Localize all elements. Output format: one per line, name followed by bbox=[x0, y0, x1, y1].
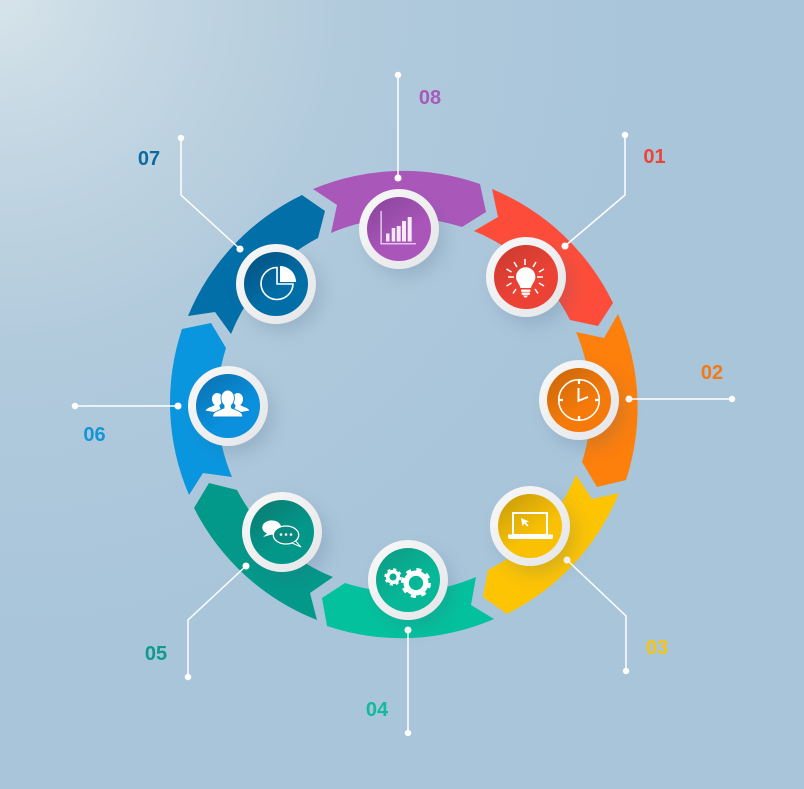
leader lines with end dots bbox=[72, 72, 734, 736]
arrow segment 04 bbox=[322, 577, 494, 638]
icon: chat bubbles bbox=[262, 520, 301, 547]
arrow segment 03 bbox=[483, 475, 619, 614]
circle badge 07 bbox=[236, 244, 322, 332]
number labels bbox=[83, 87, 723, 721]
circle badge 01 bbox=[486, 237, 572, 325]
icon: group of people bbox=[205, 390, 250, 417]
arrow segment 02 bbox=[576, 314, 638, 487]
icon: clock bbox=[559, 380, 599, 420]
circle badge 02 bbox=[539, 360, 625, 448]
icon: gears bbox=[386, 570, 429, 596]
label 03: 03 bbox=[646, 637, 668, 659]
label 08: 08 bbox=[419, 87, 441, 109]
circle badge 08 bbox=[359, 189, 445, 277]
arrow segment 06 bbox=[170, 323, 232, 495]
leader 07 bbox=[178, 136, 243, 252]
leader 08 bbox=[395, 72, 401, 181]
arrow segment 08 bbox=[313, 171, 486, 233]
label 04: 04 bbox=[366, 699, 389, 721]
arrow segment 05 bbox=[194, 483, 333, 620]
circle badge 06 bbox=[188, 366, 274, 454]
leader 04 bbox=[405, 627, 411, 736]
leader 03 bbox=[564, 557, 628, 674]
arrow segment 07 bbox=[188, 195, 325, 334]
circle badge 03 bbox=[490, 486, 576, 574]
icon: pie chart bbox=[261, 266, 296, 300]
label 02: 02 bbox=[701, 362, 723, 384]
label 05: 05 bbox=[145, 643, 167, 665]
arrow segment 01 bbox=[474, 189, 613, 326]
leader 02 bbox=[626, 396, 734, 402]
label 06: 06 bbox=[83, 424, 106, 446]
cycle ring of arrows bbox=[170, 171, 638, 638]
circle badge 04 bbox=[368, 540, 454, 628]
icon: light bulb bbox=[506, 259, 544, 298]
icon: laptop bbox=[508, 512, 553, 539]
label 07: 07 bbox=[138, 148, 160, 170]
label 01: 01 bbox=[643, 146, 666, 168]
leader 06 bbox=[72, 403, 181, 409]
circle badge 05 bbox=[242, 492, 328, 580]
icon: bar chart bbox=[380, 211, 416, 244]
leader 01 bbox=[562, 132, 628, 249]
leader 05 bbox=[186, 563, 249, 680]
